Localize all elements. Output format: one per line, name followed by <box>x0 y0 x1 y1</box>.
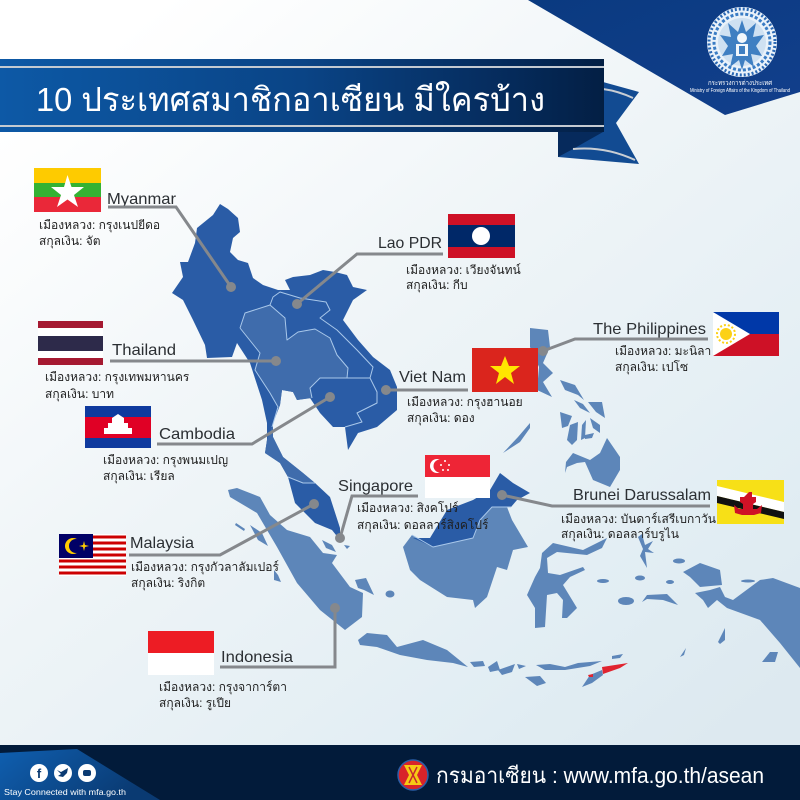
entry: Myanmar <box>34 168 236 292</box>
social caption: Stay Connected with mfa.go.th <box>4 787 126 797</box>
entry: Brunei Darussalam <box>497 480 784 542</box>
footer bar <box>0 745 800 800</box>
entry: Cambodia <box>85 392 335 484</box>
Laos, Cambodia and Vietnam borders <box>270 292 377 427</box>
entry: Cambodia: สกุลเงิน: เรียล <box>103 469 175 484</box>
entry: Myanmar: เมืองหลวง: กรุงเนปยีดอ <box>39 218 160 233</box>
entry: Brunei Darussalam: เมืองหลวง: บันดาร์เสรีเบกาวัน <box>561 512 716 526</box>
entry: Malaysia <box>59 499 319 591</box>
entry: Malaysia: Malaysia <box>130 535 194 552</box>
entry: Thailand: Thailand <box>112 342 176 359</box>
seal caption: กระทรวงการต่างประเทศ <box>708 80 772 87</box>
flag: Laos <box>448 214 515 258</box>
entry: The Philippines: เมืองหลวง: มะนิลา <box>615 344 711 358</box>
Thailand <box>240 305 348 483</box>
entry: Lao PDR <box>292 214 521 309</box>
entry: Viet Nam <box>381 348 538 426</box>
Malaysian Borneo <box>413 473 530 547</box>
entry: Viet Nam: สกุลเงิน: ดอง <box>407 411 475 426</box>
top-right corner panel <box>528 0 800 115</box>
flag: Indonesia <box>148 631 214 675</box>
Kalimantan <box>403 507 528 608</box>
entry: Singapore: สกุลเงิน: ดอลลาร์สิงคโปร์ <box>357 518 489 533</box>
entry: Cambodia: Cambodia <box>159 426 235 443</box>
entry: The Philippines: The Philippines <box>593 321 706 338</box>
entry: Singapore: เมืองหลวง: สิงคโปร์ <box>357 501 459 515</box>
mainland and Malay peninsula <box>172 204 397 540</box>
Sulawesi <box>527 538 607 628</box>
ribbon tail <box>558 82 639 164</box>
Sumatra <box>228 488 363 630</box>
entry: Lao PDR: เมืองหลวง: เวียงจันทน์ <box>406 263 521 277</box>
flag: Philippines <box>713 312 779 356</box>
entry: Brunei Darussalam: สกุลเงิน: ดอลลาร์บรูไน <box>561 527 679 542</box>
flag: Singapore <box>425 455 490 498</box>
entry: The Philippines <box>538 312 779 375</box>
entry: Lao PDR: สกุลเงิน: กีบ <box>406 278 468 293</box>
social icons: f <box>37 766 42 781</box>
Lesser Sunda islands <box>470 654 623 687</box>
ASEAN emblem <box>398 760 428 790</box>
footer social panel <box>0 749 160 800</box>
entry: Thailand: สกุลเงิน: บาท <box>45 387 114 402</box>
flag: Cambodia <box>85 406 151 448</box>
entry: Indonesia: Indonesia <box>221 649 293 666</box>
entry: Brunei Darussalam: Brunei Darussalam <box>573 487 711 504</box>
seal: Ministry of Foreign Affairs <box>707 7 777 77</box>
flag: Myanmar <box>34 168 101 212</box>
flag: Thailand <box>38 321 103 365</box>
entry: Viet Nam: เมืองหลวง: กรุงฮานอย <box>407 395 523 410</box>
entry: Indonesia <box>148 603 340 711</box>
flag: Brunei <box>717 480 784 524</box>
entry: Singapore: Singapore <box>338 478 413 495</box>
Timor-Leste <box>588 663 628 677</box>
entry: Malaysia: สกุลเงิน: ริงกิต <box>131 576 205 591</box>
entry: The Philippines: สกุลเงิน: เปโซ <box>615 360 688 375</box>
entry: Cambodia: เมืองหลวง: กรุงพนมเปญ <box>103 453 228 468</box>
entry: Myanmar: Myanmar <box>107 191 177 208</box>
title: 10 ประเทศสมาชิกอาเซียน มีใครบ้าง <box>36 81 545 118</box>
entry: Indonesia: สกุลเงิน: รูเปีย <box>159 696 231 711</box>
entry: Malaysia: เมืองหลวง: กรุงกัวลาลัมเปอร์ <box>131 560 279 575</box>
entry: Singapore <box>335 455 490 543</box>
entry: Viet Nam: Viet Nam <box>399 369 466 386</box>
entry: Indonesia: เมืองหลวง: กรุงจาการ์ตา <box>159 680 287 695</box>
entry: Myanmar: สกุลเงิน: จัต <box>39 234 101 249</box>
ribbon title banner <box>0 59 639 164</box>
map of Southeast Asia <box>172 204 800 687</box>
entry: Thailand: เมืองหลวง: กรุงเทพมหานคร <box>45 370 190 385</box>
flag: Viet Nam <box>472 348 538 392</box>
Maluku and Papua <box>235 523 800 668</box>
footer website text: กรมอาเซียน : www.mfa.go.th/asean <box>436 763 764 788</box>
entry: Thailand <box>38 321 281 402</box>
seal caption <box>690 80 790 94</box>
Philippines <box>503 328 620 487</box>
entry: Lao PDR: Lao PDR <box>378 235 442 252</box>
flag: Malaysia <box>59 534 126 576</box>
social icons <box>30 764 96 782</box>
Java <box>358 633 468 667</box>
